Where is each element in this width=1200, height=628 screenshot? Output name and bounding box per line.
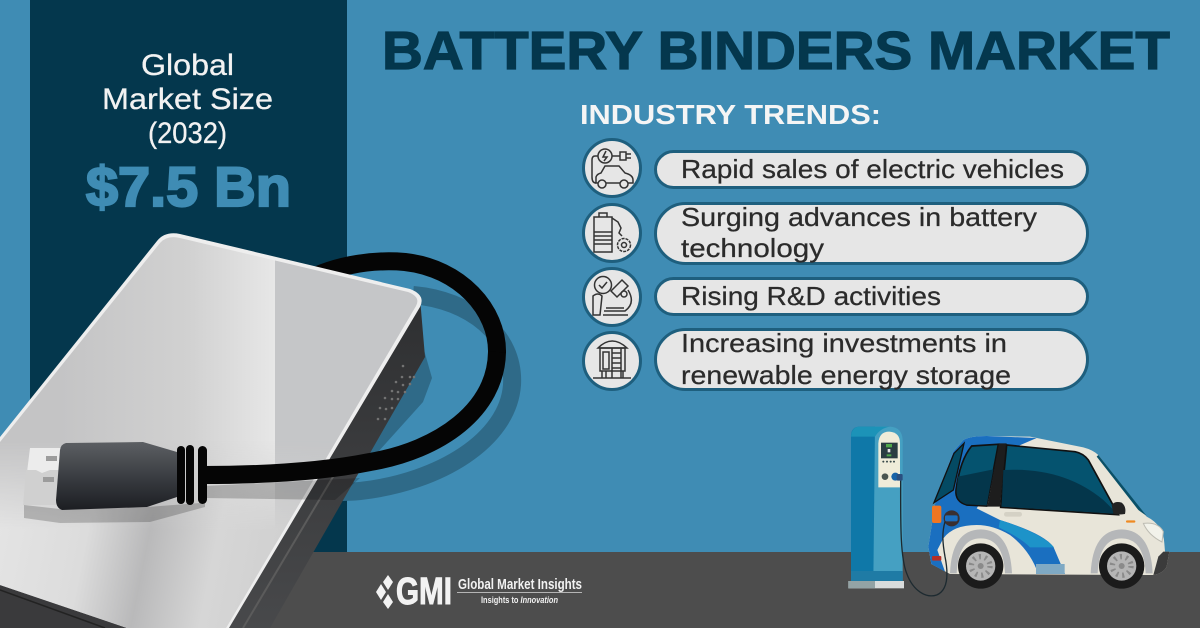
heading: industry trends: INDUSTRY TRENDS: xyxy=(580,99,881,130)
market size label: Global xyxy=(141,49,234,82)
logo: Global Market Insights xyxy=(376,571,582,613)
drive top face xyxy=(0,233,422,628)
panel: global market size xyxy=(30,0,347,552)
trend list xyxy=(584,140,1088,390)
icon: electric car xyxy=(584,140,640,196)
market size value: $7.5 Bn xyxy=(86,155,291,218)
drive side xyxy=(226,298,425,628)
trend 4: energy storage: renewable energy storage xyxy=(681,360,1011,390)
trend 1: electric vehicles: Rapid sales of electric vehicles xyxy=(681,154,1064,184)
charger panel xyxy=(878,432,900,487)
drive vents xyxy=(377,365,415,420)
plug rings xyxy=(177,445,207,505)
pill: rising R&D xyxy=(656,278,1088,314)
car details xyxy=(932,506,941,523)
front wheel xyxy=(1091,529,1153,589)
pill: energy storage xyxy=(656,330,1088,390)
car body xyxy=(928,436,1169,575)
drive shadow xyxy=(345,350,432,470)
market size label: Market Size xyxy=(102,83,273,116)
trend 2: battery technology: technology xyxy=(681,233,824,263)
market size label xyxy=(102,49,273,150)
trend 1: electric vehicles xyxy=(584,140,1088,196)
logo: Global Market Insights: Global Market Insights xyxy=(458,576,582,593)
rear wheel xyxy=(950,529,1012,589)
trend 3: R&D: Rising R&D activities xyxy=(681,281,941,311)
trend 4: energy storage xyxy=(584,328,1088,390)
cable shadow xyxy=(335,295,512,492)
cable: lower part xyxy=(203,352,497,475)
pill: rapid sales xyxy=(656,152,1088,188)
usb plug body xyxy=(56,442,177,510)
trend 2: battery technology: Surging advances in battery xyxy=(681,202,1037,232)
car windows xyxy=(934,443,964,503)
logo diamonds xyxy=(376,575,393,609)
illustration: electric car xyxy=(901,436,1169,596)
trend 4: energy storage: Increasing investments in xyxy=(681,328,1007,358)
icon: battery and gears xyxy=(584,204,640,262)
pill: battery technology xyxy=(656,204,1088,264)
usb connector xyxy=(23,448,62,505)
title: BATTERY BINDERS MARKET xyxy=(382,21,1170,81)
ground band xyxy=(0,552,1200,628)
icon: microscope xyxy=(584,268,640,326)
cable: upper part behind drive xyxy=(300,261,497,353)
logo: Global Market Insights: GMI xyxy=(396,571,452,613)
trend 3: R&D xyxy=(584,268,1088,326)
plug and cable shadow xyxy=(24,478,360,523)
icon: storage tower xyxy=(584,332,640,390)
car blue livery xyxy=(928,436,1065,574)
market size label: (2032) xyxy=(148,117,227,150)
illustration: charging station xyxy=(848,427,904,588)
illustration: external drive with cable xyxy=(0,230,512,628)
charging cable xyxy=(901,481,947,596)
logo: Global Market Insights: Insights to Innovation xyxy=(481,595,558,606)
trend 2: battery technology xyxy=(584,202,1088,264)
